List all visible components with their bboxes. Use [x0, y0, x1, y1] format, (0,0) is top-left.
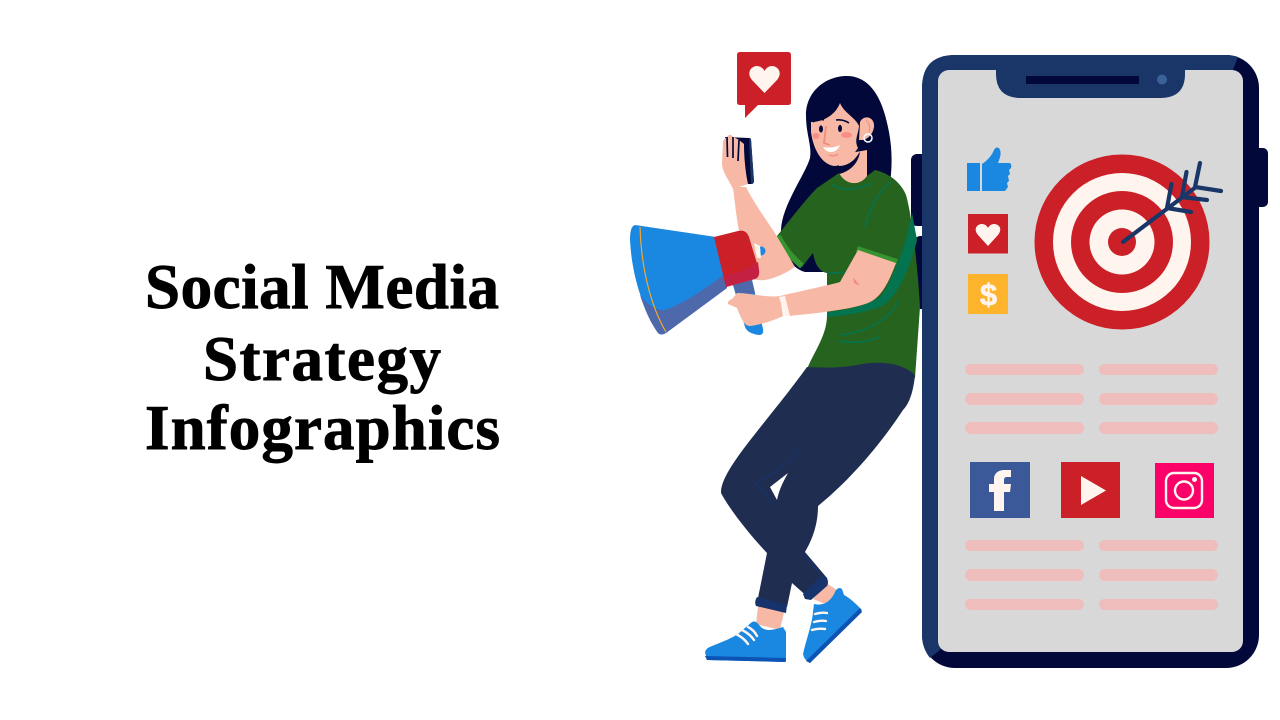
icon: facebook [970, 462, 1030, 518]
megaphone horn [630, 225, 727, 334]
raised hand [722, 135, 748, 189]
pants cuffs [755, 575, 828, 613]
earring [864, 134, 872, 142]
title: Strategy [203, 324, 441, 394]
icon: dollar square [968, 274, 1008, 314]
chart: target [1034, 154, 1210, 330]
icon: instagram [1155, 463, 1214, 518]
phone body [922, 55, 1259, 668]
icon: heart speech bubble [737, 52, 791, 118]
ankles [756, 583, 837, 630]
ear [859, 117, 874, 140]
woman figure [630, 76, 920, 663]
neck [839, 150, 867, 184]
phone screen [938, 70, 1243, 652]
icon: thumbs up [967, 148, 1011, 191]
shirt [777, 170, 920, 378]
raised arm [733, 187, 795, 280]
phone [911, 55, 1268, 668]
title: Infographics [145, 393, 500, 463]
icon: dollar square: $ [980, 277, 997, 312]
phone notch [996, 70, 1185, 98]
phone side buttons [911, 148, 1268, 309]
wristband [779, 296, 790, 316]
pants details [755, 449, 820, 574]
megaphone bell [714, 231, 766, 287]
phone in hand [725, 137, 754, 184]
arrow in target [1123, 163, 1221, 242]
text placeholder lines: upper [965, 364, 1218, 434]
left shoe [705, 621, 786, 662]
face [811, 103, 859, 166]
neck shadow [839, 152, 860, 174]
pants [721, 363, 915, 607]
icon: youtube [1061, 462, 1120, 518]
shirt detail lines [827, 181, 899, 342]
sleeve bands [778, 236, 897, 266]
icon: heart square [968, 214, 1008, 254]
title [145, 252, 500, 463]
elbow crease [853, 277, 860, 286]
text placeholder lines: lower [965, 540, 1218, 610]
lower hand [728, 293, 783, 326]
lower arm [780, 250, 896, 316]
title: Social Media [145, 252, 499, 322]
right shoe [803, 588, 862, 663]
facial features [812, 119, 870, 156]
shirt shading [827, 213, 917, 317]
megaphone handle [733, 280, 763, 335]
hair [781, 76, 892, 272]
